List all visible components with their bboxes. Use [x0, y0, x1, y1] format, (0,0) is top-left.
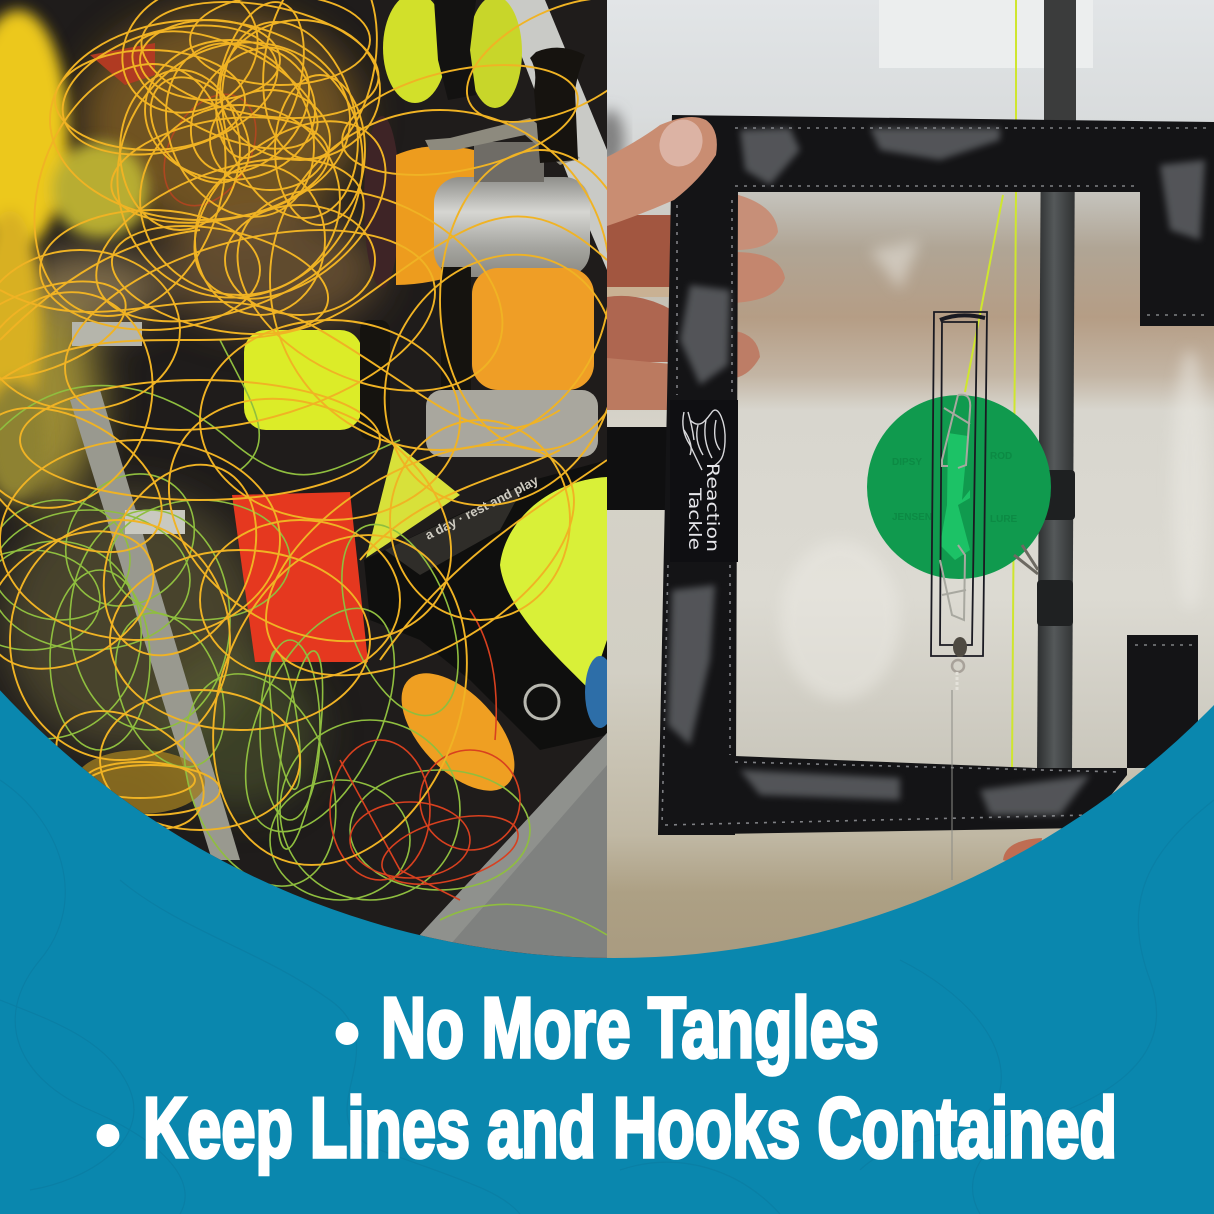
red tangled lines	[145, 78, 525, 900]
left column	[658, 190, 738, 835]
neon spool left	[244, 320, 390, 440]
disc embossed text: ROD	[990, 451, 1012, 462]
neon cone	[366, 443, 460, 558]
line 1: no more tangles: No More Tangles	[381, 981, 879, 1076]
pale rectangle top	[879, 0, 1093, 68]
fishing rod	[1037, 192, 1075, 768]
stitched pocket	[931, 312, 987, 656]
fingertip 2	[735, 252, 785, 303]
glossy highlights on frame	[668, 128, 1205, 815]
fingertip below bag	[1003, 838, 1042, 862]
barrel swivel	[952, 637, 967, 692]
big neon spool	[500, 477, 607, 690]
metal clip by rod	[1014, 545, 1038, 574]
reel ring	[525, 685, 559, 719]
clear leader line	[951, 690, 953, 880]
brand text: Reaction	[702, 463, 722, 552]
red orange spool	[232, 492, 368, 662]
brand text	[684, 463, 722, 552]
logo mark: fish and angler sketch	[683, 410, 725, 470]
photo circle segment	[0, 0, 1214, 960]
thumbnail	[652, 112, 710, 174]
clamp on rail	[125, 510, 185, 534]
bottom band	[658, 756, 1127, 835]
disc arm	[940, 433, 970, 560]
silver reel	[425, 48, 590, 277]
bracket top rail	[72, 322, 142, 346]
disc embossed text: DIPSY	[892, 457, 922, 468]
yellow line	[965, 0, 1016, 770]
green disc	[867, 395, 1051, 579]
green tangled lines	[0, 340, 607, 935]
strap loop	[607, 427, 667, 510]
right photo: bag holding rig	[596, 0, 1214, 960]
line 1: no more tangles	[333, 981, 879, 1077]
upper finger left of frame	[607, 215, 677, 287]
yellow fluff spool	[0, 10, 148, 500]
fingertip 1	[735, 194, 778, 250]
aluminium box corner	[418, 733, 607, 960]
bullet text	[94, 981, 1117, 1179]
chartreuse spool top	[383, 0, 522, 108]
brand label	[670, 400, 738, 562]
orange spool centre	[472, 268, 594, 390]
bag highlights	[780, 240, 1208, 700]
swivel snap clips	[940, 395, 970, 620]
blue reel label	[585, 656, 607, 728]
aluminium rail top right	[500, 0, 607, 270]
aluminium rail left	[70, 390, 240, 860]
gap tone	[607, 287, 672, 297]
red reel piece	[90, 43, 155, 85]
middle finger left of frame	[607, 296, 672, 362]
bottom right corner	[1127, 635, 1198, 768]
fingers behind frame	[607, 194, 785, 410]
background topographic texture	[0, 780, 1214, 1214]
disc embossed text	[892, 451, 1018, 525]
fingertip 3	[735, 331, 760, 378]
thumb over frame	[607, 112, 717, 226]
disc embossed text: JENSEN	[892, 512, 932, 523]
lower finger left of frame	[607, 358, 672, 410]
black bag frame	[658, 115, 1214, 835]
clear bag window	[735, 190, 1214, 770]
brand text: Tackle	[684, 487, 704, 550]
top band	[669, 115, 1214, 200]
rod top	[1044, 0, 1076, 125]
left photo: tangled fishing lines	[0, 0, 672, 960]
yellow coil lower left	[75, 750, 205, 814]
dark side plate and orange spool	[364, 116, 474, 288]
disc embossed text: LURE	[990, 514, 1018, 525]
line 2: keep lines and hooks contained: •	[94, 1090, 122, 1179]
blurred tackle tones	[0, 10, 380, 810]
top reel handle	[434, 0, 476, 100]
yellow tangled lines	[0, 0, 607, 866]
line 1: no more tangles: •	[333, 988, 361, 1077]
reel pillar and foot	[426, 267, 598, 457]
blurred dark patch behind hand	[607, 104, 632, 157]
top right corner	[1140, 130, 1214, 326]
black reel with label: a day · rest and play	[423, 472, 541, 543]
black reel with label	[364, 460, 607, 750]
frame stitching	[662, 128, 1210, 825]
orange spool bottom	[402, 673, 514, 791]
